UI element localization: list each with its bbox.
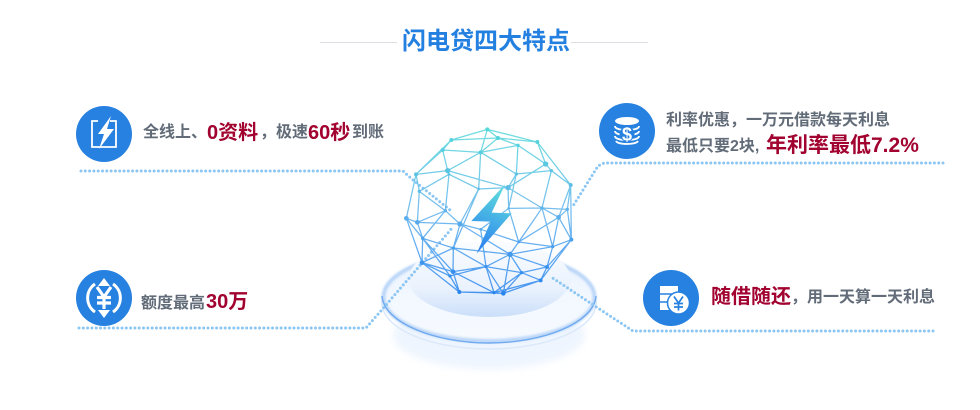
connector: bottom left bbox=[79, 227, 453, 328]
icon: coin stack: $ bbox=[622, 124, 632, 144]
text lines: 最低只要2块, bbox=[666, 138, 759, 155]
text line bbox=[143, 122, 384, 144]
feature: credit limit bbox=[76, 270, 248, 326]
text lines bbox=[666, 111, 919, 157]
title text: 闪电贷四大特点 bbox=[402, 28, 570, 55]
text line: 到账 bbox=[352, 124, 384, 141]
feature: flexible repayment bbox=[643, 270, 935, 326]
icon: coin stack bbox=[599, 103, 655, 159]
connector: top left bbox=[81, 171, 450, 210]
text line: 0资料 bbox=[207, 122, 258, 144]
disc pedestal bbox=[382, 241, 596, 369]
feature: zero paperwork bbox=[76, 106, 384, 162]
icon: yen with arrows bbox=[76, 270, 132, 326]
title rule right bbox=[571, 42, 648, 43]
sphere mesh bbox=[404, 127, 573, 296]
text line: 60秒 bbox=[308, 122, 350, 144]
icon: bill with yen coin bbox=[643, 270, 699, 326]
lightning bolt bbox=[471, 184, 512, 254]
text line: 随借随还 bbox=[711, 286, 791, 308]
title rule left bbox=[320, 42, 397, 43]
text line bbox=[141, 291, 248, 313]
text line bbox=[711, 286, 935, 308]
text line: 额度最高 bbox=[141, 295, 205, 312]
text lines: 利率优惠，一万元借款每天利息 bbox=[666, 112, 890, 129]
connector: bottom right bbox=[551, 277, 933, 331]
text lines: 年利率最低7.2% bbox=[766, 134, 919, 157]
text line: ，用一天算一天利息 bbox=[791, 289, 935, 306]
feature: low interest bbox=[599, 103, 919, 159]
text line: 30万 bbox=[206, 291, 248, 313]
text line: 全线上、 bbox=[143, 124, 207, 141]
connector: top right bbox=[573, 163, 943, 206]
text line: ，极速 bbox=[260, 124, 308, 141]
icon: lightning in frame bbox=[76, 106, 132, 162]
